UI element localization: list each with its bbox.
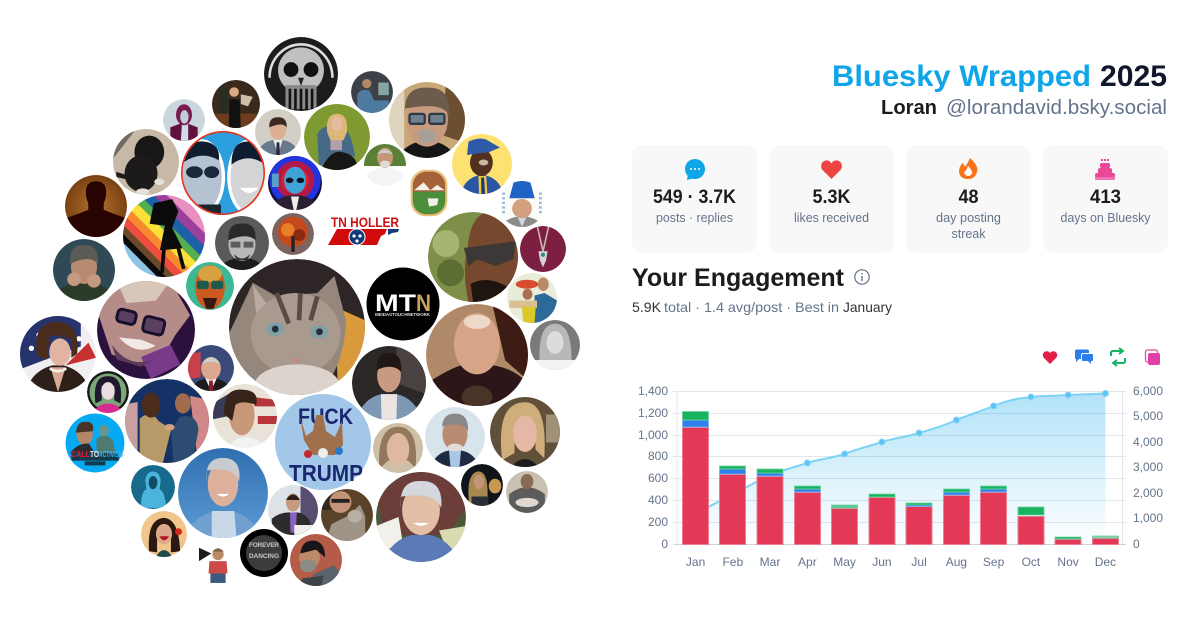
right axis labels: 1,000	[1133, 511, 1163, 525]
right axis labels: 3,000	[1133, 460, 1163, 474]
avatar: young man before flag	[213, 384, 277, 448]
right axis labels: 6,000	[1133, 384, 1163, 398]
month labels	[686, 555, 1116, 569]
panel: days on Bluesky	[1043, 145, 1168, 253]
avatar: orange painted man	[186, 262, 234, 310]
avatar: man with sparkly blue hat	[502, 181, 542, 227]
icon: flame	[959, 158, 977, 179]
avatar: cartoon man with megaphone	[199, 548, 228, 583]
icon: likes heart	[1043, 351, 1057, 364]
avatar: Call to Activism: TO	[90, 449, 99, 459]
left axis labels: 0	[661, 537, 668, 551]
icon: reposts arrows	[1111, 348, 1125, 366]
panel: posting streak: 48	[958, 187, 978, 208]
avatar: rainbow stripes with silhouette	[123, 195, 205, 277]
panel: posts and replies	[632, 145, 757, 253]
month labels: Aug	[946, 555, 967, 569]
panel: posting streak: streak	[952, 227, 986, 241]
avatar: man in grey t-shirt	[506, 471, 548, 513]
avatar: cartoon man in blue cap	[452, 134, 512, 194]
replies bars	[682, 420, 1006, 506]
avatar: Fuck Trump sticker: TRUMP	[289, 460, 363, 486]
heading: Your Engagement: Your Engagement	[632, 264, 845, 292]
avatar: man with grey cat	[321, 489, 373, 541]
avatar: MeidasTouch Network	[366, 268, 440, 340]
right axis labels: 0	[1133, 537, 1140, 551]
avatar: Forever Dancing black plaque	[240, 529, 288, 577]
avatar: Call to Activism	[66, 414, 124, 472]
avatar: white-haired man	[364, 144, 406, 186]
panel: likes received: 5.3K	[812, 187, 851, 208]
avatar: blonde woman on grass	[304, 104, 370, 170]
month labels: Apr	[798, 555, 817, 569]
panel: posts and replies: 549 · 3.7K	[653, 187, 736, 208]
user name and handle: Loran	[881, 97, 937, 119]
avatar: two men, red ring	[181, 131, 265, 215]
avatar: laughing woman with red flower	[141, 511, 187, 557]
line markers	[804, 390, 1108, 466]
cumulative line	[696, 394, 1105, 513]
icon: heart	[821, 160, 842, 179]
avatar: comic girl	[87, 371, 129, 413]
avatar: blonde glam woman	[490, 397, 560, 467]
avatar: blonde woman close-up	[373, 423, 423, 473]
chart legend	[1043, 348, 1160, 366]
avatar: Forever Dancing black plaque: DANCING	[249, 553, 279, 560]
engagement summary: January	[843, 299, 892, 315]
avatar: man with purple tie	[268, 485, 318, 535]
avatar: smiling man with purple tint	[97, 281, 195, 379]
right axis labels: 5,000	[1133, 409, 1163, 423]
avatar: grey man with glasses	[215, 216, 269, 270]
avatar: green trail badge	[411, 170, 447, 216]
avatar: necklace on burgundy	[520, 226, 566, 272]
right axis labels: 2,000	[1133, 486, 1163, 500]
engagement summary	[632, 299, 892, 315]
grid lines	[673, 391, 1126, 544]
logo: TN Holler	[328, 214, 399, 245]
avatar: MeidasTouch Network: N	[416, 290, 431, 317]
avatar: Fuck Trump sticker: FUCK	[298, 404, 353, 429]
avatar: bald man with microphone	[426, 304, 528, 408]
panel: days on Bluesky: days on Bluesky	[1060, 211, 1151, 225]
panel: likes received: likes received	[794, 211, 869, 225]
avatar: Call to Activism: CALL	[71, 449, 90, 459]
avatar: woman with US flag	[20, 316, 96, 392]
avatar: blue hoodie figure	[131, 465, 175, 509]
icon: chat bubble	[685, 159, 705, 180]
avatar: woman with golden dog	[461, 464, 503, 506]
left axis labels: 1,200	[638, 406, 668, 420]
month labels: Jan	[686, 555, 705, 569]
avatar: sunglasses man on foliage	[428, 212, 518, 302]
icon: replies bubbles	[1075, 350, 1093, 364]
icon: info	[855, 270, 869, 284]
avatar: silhouette	[65, 175, 127, 237]
left axis labels	[638, 384, 668, 551]
panel: days on Bluesky: 413	[1090, 187, 1121, 208]
right axis labels	[1133, 384, 1163, 551]
left axis labels: 800	[648, 449, 668, 463]
month labels: Feb	[722, 555, 743, 569]
avatar: blonde woman, greyscale	[530, 320, 580, 370]
title: Bluesky Wrapped	[832, 60, 1091, 93]
left axis labels: 600	[648, 471, 668, 485]
avatar: Walz with flag	[188, 345, 234, 391]
avatar: smiling man in blue blazer	[178, 448, 268, 538]
avatar: bearded man with beanie	[290, 534, 342, 586]
month labels: Sep	[983, 555, 1005, 569]
left axis labels: 1,000	[638, 428, 668, 442]
avatar: George Takei	[376, 472, 466, 562]
panel: likes received	[769, 145, 894, 253]
panel: posting streak	[906, 145, 1031, 253]
month labels: Jun	[872, 555, 892, 569]
avatar: Forever Dancing black plaque: FOREVER	[249, 542, 279, 549]
icon: quotes squares	[1146, 350, 1160, 365]
avatar: skull with headphones	[264, 37, 338, 111]
avatar: couple in hats	[507, 273, 557, 323]
month labels: Nov	[1057, 555, 1079, 569]
avatar: Call to Activism: ACTIVISM	[99, 449, 123, 459]
avatar: Fuck Trump sticker	[275, 394, 371, 490]
avatar: MeidasTouch Network: MEIDASTOUCHNETWORK	[375, 312, 431, 317]
combined bar and line chart	[638, 384, 1163, 569]
month labels: Mar	[760, 555, 780, 569]
avatar: man with couch and companion	[351, 71, 393, 113]
avatar: woman holding dog	[212, 80, 260, 128]
avatar: man in light blazer	[352, 346, 426, 420]
avatar: man in suit	[255, 109, 301, 155]
likes bars	[682, 428, 1118, 544]
cumulative area	[696, 394, 1105, 544]
avatar: orange tree	[272, 213, 314, 255]
month labels: Dec	[1095, 555, 1116, 569]
left axis labels: 400	[648, 493, 668, 507]
panel: posts and replies: posts · replies	[656, 211, 733, 225]
avatar: grey-haired man with goatee	[425, 407, 485, 467]
left axis labels: 1,400	[638, 384, 668, 398]
title: 2025	[1100, 60, 1167, 93]
avatar cluster	[20, 37, 580, 586]
engagement summary: total · 1.4 avg/post · Best in	[664, 299, 839, 315]
avatar: MeidasTouch Network: MT	[375, 290, 416, 317]
avatar: man with dark glasses and grey hair	[389, 82, 465, 158]
right axis labels: 4,000	[1133, 435, 1163, 449]
avatar: blue alien	[268, 155, 322, 210]
avatar: man pulling turtleneck	[53, 239, 115, 301]
avatar: big tabby cat	[229, 259, 365, 405]
avatar: black dog	[113, 129, 179, 195]
month labels: Oct	[1022, 555, 1041, 569]
avatar: woman in maroon	[163, 99, 205, 141]
logo: TN Holler: TN HOLLER	[331, 214, 399, 230]
left axis labels: 200	[648, 515, 668, 529]
engagement summary: 5.9K	[632, 299, 662, 315]
month labels: May	[833, 555, 856, 569]
reposts bars	[682, 412, 1118, 539]
avatar: Harris handshake	[125, 379, 209, 463]
user name and handle: @lorandavid.bsky.social	[946, 97, 1167, 119]
panel: posting streak: day posting	[936, 211, 1001, 225]
month labels: Jul	[911, 555, 927, 569]
icon: cake	[1095, 159, 1115, 180]
